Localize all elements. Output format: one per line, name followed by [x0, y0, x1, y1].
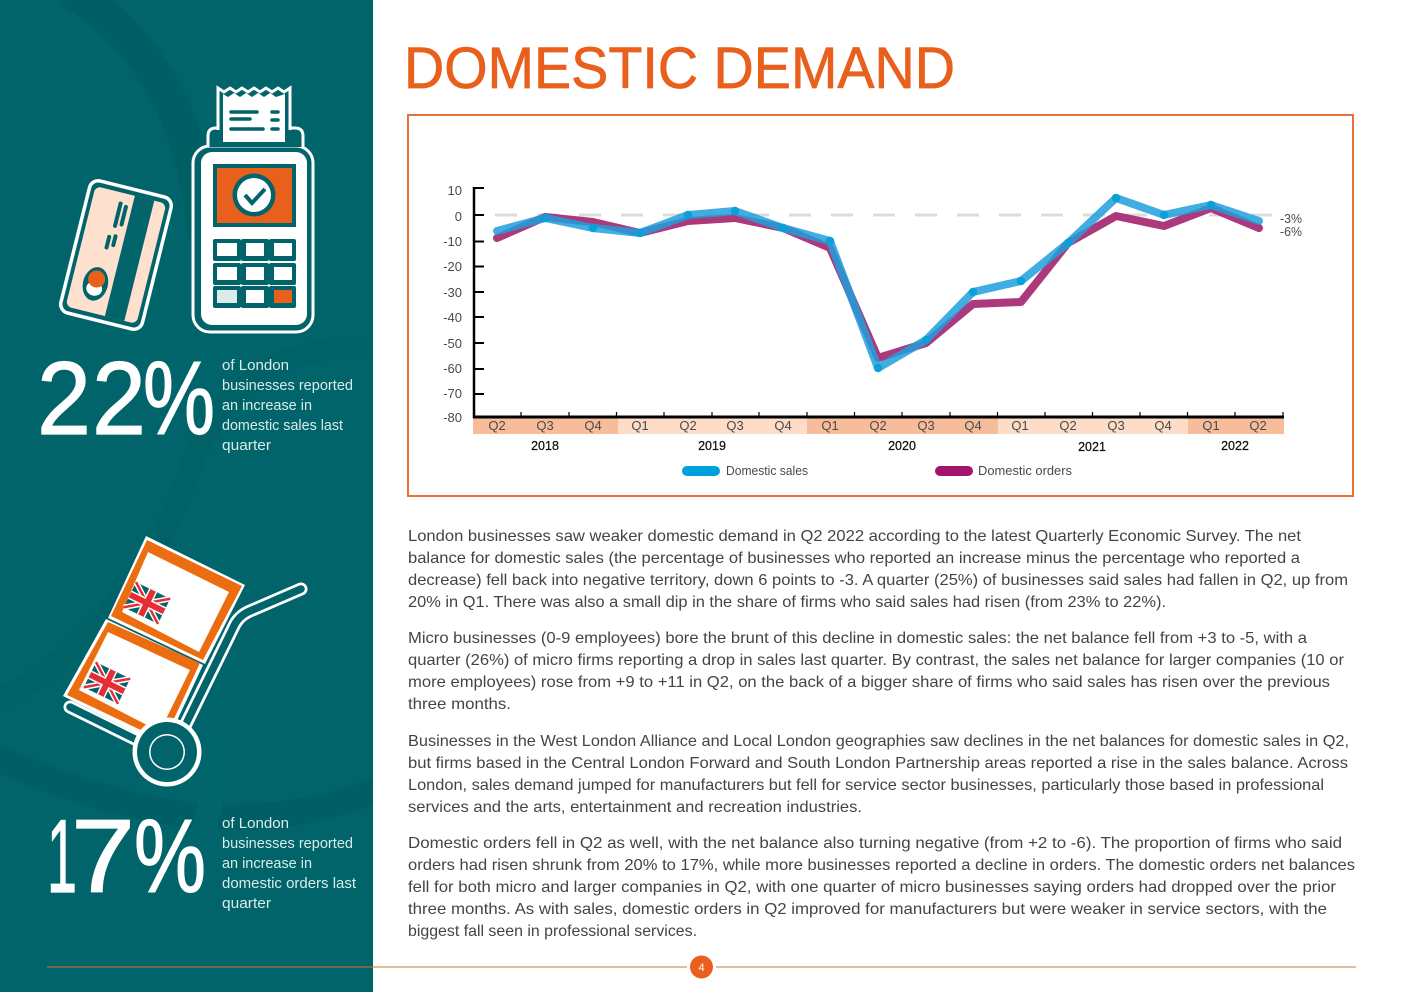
chart: x axis: Q2	[1059, 418, 1077, 433]
panel: left teal sidebar	[0, 0, 400, 992]
text block: 22% statistic: domestic sales last	[222, 418, 343, 434]
icon: card payment terminal	[193, 88, 313, 332]
chart: y axis: -60	[443, 361, 462, 376]
footer rule and page number: 4	[698, 962, 705, 974]
text block: 17% statistic: businesses reported	[222, 836, 353, 852]
chart: x axis: Q3	[1107, 418, 1125, 433]
text block: paragraph 2: Micro businesses (0-9 employees) bore the brunt of this decline in domestic sales: the net balance fell from +3 to -5, with a	[408, 630, 1307, 647]
text block: paragraph 1: decrease) fell back into negative territory, down 6 points to -3. A quarter (25%) of businesses said sales had fallen in Q2, up from	[408, 572, 1348, 589]
chart: x axis: Q4	[774, 418, 792, 433]
text block: paragraph 1: 20% in Q1. There was also a small dip in the share of firms who said sales had risen (from 23% to 22%).	[408, 594, 1166, 611]
chart: y axis: -50	[443, 336, 462, 351]
text block: 22% statistic	[37, 341, 353, 457]
chart: x axis: Q1	[1011, 418, 1029, 433]
text block: 17% statistic	[47, 799, 356, 915]
chart: x axis: Q1	[821, 418, 839, 433]
text block: 17% statistic: an increase in	[222, 856, 312, 872]
text block: paragraph 4	[408, 835, 1355, 940]
chart: x axis: Q3	[536, 418, 554, 433]
chart: y axis: -30	[443, 285, 462, 300]
chart: x axis: Q4	[584, 418, 602, 433]
chart: y axis: -70	[443, 386, 462, 401]
text block: paragraph 3: London, sales demand jumped for manufacturers but fell for service sector businesses, particularly those based in professional	[408, 777, 1324, 794]
text block: paragraph 4: biggest fall seen in professional services.	[408, 923, 697, 940]
chart: x axis: 2018	[531, 439, 559, 453]
legend: domestic orders: Domestic orders	[978, 463, 1072, 478]
legend: domestic sales: Domestic sales	[726, 463, 808, 478]
text block: paragraph 2: three months.	[408, 696, 511, 713]
chart: x axis: 2020	[888, 439, 916, 453]
icon: union flag upper	[124, 582, 170, 624]
text block: 17% statistic: quarter	[222, 896, 271, 912]
chart: x axis: Q1	[631, 418, 649, 433]
text block: paragraph 3: but firms based in the Central London Forward and South London Partnership areas reported a rise in the sales balance. Across	[408, 755, 1348, 772]
chart: end value labels: -6%	[1280, 224, 1302, 239]
text block: paragraph 1	[408, 528, 1348, 611]
panel: line chart	[408, 115, 1353, 496]
chart: end value labels: -3%	[1280, 211, 1302, 226]
legend: domestic sales	[682, 463, 808, 478]
chart: x axis: Q3	[917, 418, 935, 433]
chart: end value labels	[1280, 211, 1302, 239]
text block: paragraph 3	[408, 733, 1349, 816]
text block: paragraph 3: services and the arts, entertainment and recreation industries.	[408, 799, 862, 816]
chart: x axis: Q2	[488, 418, 506, 433]
text block: 17% statistic: %	[134, 799, 206, 915]
text block: 22% statistic: 2	[92, 341, 146, 457]
chart: x axis: Q3	[726, 418, 744, 433]
text block: 22% statistic: %	[143, 341, 215, 457]
text block: paragraph 4: Domestic orders fell in Q2 as well, with the net balance also turning negative (from +2 to -6). The proportion of firms who said	[408, 835, 1342, 852]
chart: x axis: Q4	[1154, 418, 1172, 433]
text block: 22% statistic: quarter	[222, 438, 271, 454]
icon: payment card	[59, 179, 173, 331]
chart: x axis	[473, 412, 1284, 454]
chart: x axis: Q1	[1202, 418, 1220, 433]
text block: 22% statistic: 2	[37, 341, 91, 457]
chart: x axis: Q2	[869, 418, 887, 433]
chart: y axis: 10	[448, 183, 462, 198]
icon: hand truck with boxes	[63, 536, 301, 786]
text block: paragraph 2	[408, 630, 1344, 713]
text block: 22% statistic: of London	[222, 358, 289, 374]
text block: paragraph 1: balance for domestic sales (the percentage of businesses who reported an increase minus the percentage who reported a	[408, 550, 1300, 567]
text block: paragraph 2: more employees) rose from +9 to +11 in Q2, on the back of a bigger share of firms who said sales has risen over the previous	[408, 674, 1330, 691]
chart: x axis: 2022	[1221, 439, 1249, 453]
chart: x axis: Q2	[1249, 418, 1267, 433]
text block: 17% statistic: 1	[47, 799, 77, 915]
text block: paragraph 1: London businesses saw weaker domestic demand in Q2 2022 according to the latest Quarterly Economic Survey. The net	[408, 528, 1302, 545]
text block: 17% statistic: of London	[222, 816, 289, 832]
text block: paragraph 2: quarter (26%) of micro firms reporting a drop in sales last quarter. By contrast, the sales net balance for larger companies (10 or	[408, 652, 1344, 669]
chart: y axis: 0	[455, 209, 462, 224]
chart: quarter bands	[473, 418, 1284, 434]
chart: y axis: -80	[443, 410, 462, 425]
chart: y axis: -10	[443, 234, 462, 249]
text block: 22% statistic: an increase in	[222, 398, 312, 414]
text block: paragraph 4: three months. As with sales, domestic orders in Q2 improved for manufacturers but were weaker in service sectors, with the	[408, 901, 1327, 918]
chart: y axis: -40	[443, 310, 462, 325]
chart: domestic sales line	[497, 194, 1259, 372]
chart: domestic orders line	[497, 208, 1259, 358]
text block: paragraph 4: orders had risen shrunk from 20% to 17%, while more businesses reported a decline in orders. The domestic orders net balances	[408, 857, 1355, 874]
chart: x axis: 2021	[1078, 440, 1106, 454]
legend: domestic orders	[935, 463, 1072, 478]
text block: paragraph 3: Businesses in the West London Alliance and Local London geographies saw declines in the net balances for domestic sales in Q2,	[408, 733, 1349, 750]
text block: 17% statistic: 7	[71, 799, 135, 915]
chart: x axis: 2019	[698, 439, 726, 453]
footer rule and page number	[47, 956, 1356, 978]
chart: y axis	[443, 183, 484, 425]
title: DOMESTIC DEMAND	[404, 36, 955, 101]
chart: x axis: Q2	[679, 418, 697, 433]
text block: paragraph 4: fell for both micro and larger companies in Q2, with one quarter of micro businesses saying orders had dropped over the prior	[408, 879, 1336, 896]
text block: 17% statistic: domestic orders last	[222, 876, 356, 892]
text block: 22% statistic: businesses reported	[222, 378, 353, 394]
chart: x axis: Q4	[964, 418, 982, 433]
chart: y axis: -20	[443, 259, 462, 274]
icon: union flag lower	[84, 662, 130, 704]
